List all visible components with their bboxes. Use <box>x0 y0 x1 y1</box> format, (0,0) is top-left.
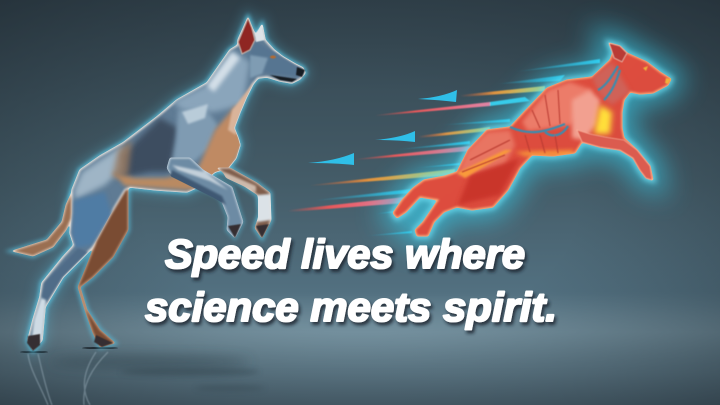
blue vessels <box>510 66 620 135</box>
arrow: top <box>418 90 457 102</box>
eye and nose <box>643 66 671 84</box>
muscle striations <box>462 90 560 172</box>
right dog: anatomical muscle view <box>393 43 671 236</box>
title <box>145 231 557 330</box>
neck ridge highlight <box>207 52 240 92</box>
chest <box>197 104 240 174</box>
foreleg and vessels <box>462 43 671 180</box>
withers <box>172 50 250 112</box>
near foreleg <box>167 158 243 238</box>
far foreleg highlight <box>222 171 256 192</box>
leg orange edge <box>457 150 512 178</box>
flank tan <box>112 140 132 178</box>
muscle shading <box>457 62 630 205</box>
belly glow <box>515 150 575 156</box>
neck <box>592 62 630 105</box>
paws <box>27 224 269 351</box>
dog glow <box>12 18 305 350</box>
cheek <box>250 55 268 78</box>
leg glow <box>458 158 520 205</box>
dog body <box>393 43 671 236</box>
title line 1: Speed lives where <box>165 231 525 277</box>
tail <box>12 192 73 256</box>
body shading <box>31 42 302 344</box>
floor shadow and reflections <box>20 347 265 405</box>
ear <box>609 43 627 62</box>
arrow: lower <box>308 153 354 165</box>
neck front <box>228 82 254 135</box>
back muscle <box>522 82 592 131</box>
speed streaks <box>288 59 600 236</box>
dog body <box>28 18 305 350</box>
eye <box>270 56 276 58</box>
red ear <box>238 18 255 54</box>
arrow: middle <box>375 131 415 142</box>
thigh muscle <box>457 130 515 175</box>
left dog: natural greyhound <box>12 18 305 351</box>
far foreleg <box>217 168 271 238</box>
white ear <box>255 25 265 42</box>
dog glow <box>393 43 671 236</box>
forearm highlight <box>172 165 228 190</box>
thigh <box>72 192 112 248</box>
shoulder muscle <box>572 90 600 140</box>
rump highlight <box>74 145 126 200</box>
dark flank <box>122 118 178 178</box>
rear silhouette <box>12 18 305 350</box>
far hind leg <box>78 185 128 347</box>
lower leg <box>42 248 88 303</box>
near foreleg shade <box>170 170 226 205</box>
shoulder muscle <box>172 108 218 165</box>
nose and mouth <box>270 67 305 82</box>
yellow chest glow <box>594 105 612 134</box>
forelegs <box>167 158 271 238</box>
tan belly <box>112 172 204 190</box>
arrows pointing backward <box>308 90 457 165</box>
head details <box>27 18 305 351</box>
shoulder highlight <box>182 104 208 124</box>
face <box>252 44 302 74</box>
foreleg <box>577 130 652 180</box>
hock white <box>31 298 46 344</box>
title line 2: science meets spirit. <box>145 284 557 330</box>
far pastern <box>258 194 271 222</box>
